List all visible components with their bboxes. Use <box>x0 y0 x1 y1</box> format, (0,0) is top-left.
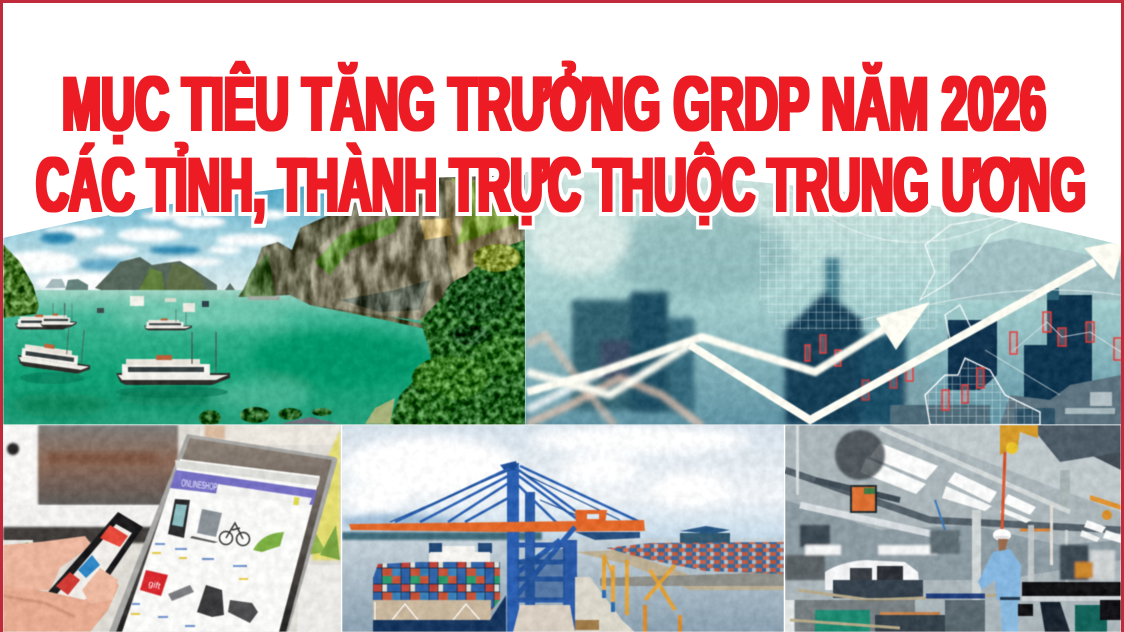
roof and flag <box>280 417 340 424</box>
water <box>3 290 528 425</box>
arrowheads <box>876 241 1124 350</box>
sandy edge <box>365 398 395 424</box>
foreground jungle <box>388 240 528 426</box>
kitchen background <box>3 425 341 632</box>
palm tops <box>199 407 332 426</box>
growth arrows <box>527 262 1095 426</box>
right karst cliff <box>238 170 525 330</box>
tablet <box>109 434 337 632</box>
photo: economic growth chart <box>525 165 1124 427</box>
title <box>36 61 1086 228</box>
container ship <box>373 543 506 632</box>
water and shoreline <box>342 532 784 632</box>
hand holding phone <box>3 512 143 632</box>
plant and pot <box>297 430 341 632</box>
black chassis <box>1018 582 1121 632</box>
orange status sign <box>850 485 877 513</box>
background clutter <box>785 525 1115 580</box>
sky and clouds <box>3 175 525 290</box>
photo: online shopping on tablet <box>3 425 341 632</box>
red candlesticks <box>805 312 1122 410</box>
finance backdrop <box>525 165 1124 427</box>
yard cranes <box>604 555 680 632</box>
tour boats <box>15 296 280 398</box>
wall fan <box>835 430 885 480</box>
sharp skyscrapers <box>890 288 1121 425</box>
quay <box>513 577 635 632</box>
photo: Ha Long Bay <box>2 170 528 426</box>
ceiling beams and lights <box>785 428 1121 543</box>
left cliff <box>3 244 39 318</box>
tablet products <box>131 499 284 627</box>
ship to shore crane <box>349 461 645 632</box>
hoist and hose <box>935 425 1121 530</box>
distant karst islands <box>45 256 236 291</box>
sky and clouds <box>340 425 784 545</box>
tablet: ONLINESHOP <box>181 478 218 493</box>
photo: container port <box>340 425 784 632</box>
worker <box>978 529 1021 632</box>
world map mesh <box>760 180 1121 425</box>
ceiling <box>785 425 1121 632</box>
white car on line <box>825 560 920 590</box>
blurred city skyline <box>572 258 932 425</box>
tablet products: gift <box>147 578 162 591</box>
far shore cranes and container yard <box>606 526 784 574</box>
columns <box>796 425 1068 632</box>
work benches and bins <box>785 580 1000 632</box>
photo: car assembly factory <box>785 425 1121 632</box>
